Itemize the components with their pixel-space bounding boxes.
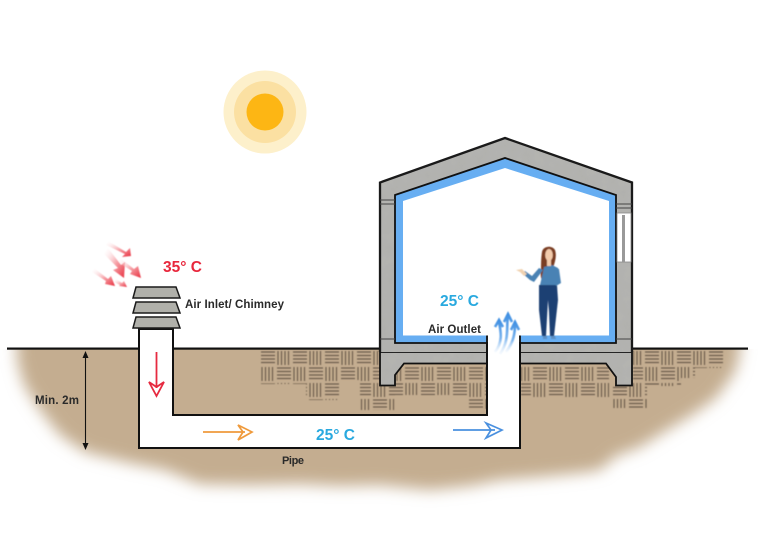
down arrow red bbox=[149, 352, 164, 396]
neck bbox=[547, 260, 551, 266]
raised arm bbox=[522, 268, 543, 282]
brick hatch pattern in soil bbox=[260, 350, 725, 410]
roof and wall concrete bbox=[380, 138, 632, 352]
torso bbox=[540, 265, 558, 285]
sun bbox=[224, 70, 306, 154]
ground line bbox=[7, 348, 748, 350]
label: room temperature: 25° C bbox=[440, 293, 479, 310]
house bbox=[380, 138, 632, 386]
foundation outline bbox=[380, 352, 632, 386]
pipe bbox=[139, 329, 520, 448]
label: min 2m: Min. 2m bbox=[35, 395, 79, 407]
chimney caps bbox=[133, 287, 180, 328]
blue arrow bbox=[453, 423, 502, 438]
shoes bbox=[543, 336, 556, 339]
hot air arrows bbox=[92, 241, 141, 287]
label: air outlet: Air Outlet bbox=[428, 324, 481, 336]
hair bbox=[541, 247, 556, 283]
outlet air arrows bbox=[495, 314, 519, 354]
blue insulation bbox=[395, 158, 616, 343]
woman figure bbox=[516, 247, 561, 339]
label: pipe: Pipe bbox=[282, 455, 304, 467]
label: air inlet: Air Inlet/ Chimney bbox=[185, 299, 285, 311]
foundation fill bbox=[380, 352, 632, 386]
label: 35 C: 35° C bbox=[163, 259, 202, 276]
depth arrow bbox=[82, 351, 88, 450]
wall details bbox=[380, 200, 632, 339]
room interior bbox=[403, 168, 609, 336]
window bbox=[617, 213, 631, 262]
hand bbox=[516, 269, 527, 276]
roof and wall outline bbox=[380, 138, 632, 352]
face bbox=[545, 249, 553, 261]
right arm bbox=[554, 268, 561, 286]
soil ground mass bbox=[17, 320, 740, 490]
jeans bbox=[539, 285, 558, 336]
label: pipe temperature: 25° C bbox=[316, 427, 355, 444]
orange arrow bbox=[203, 425, 252, 440]
